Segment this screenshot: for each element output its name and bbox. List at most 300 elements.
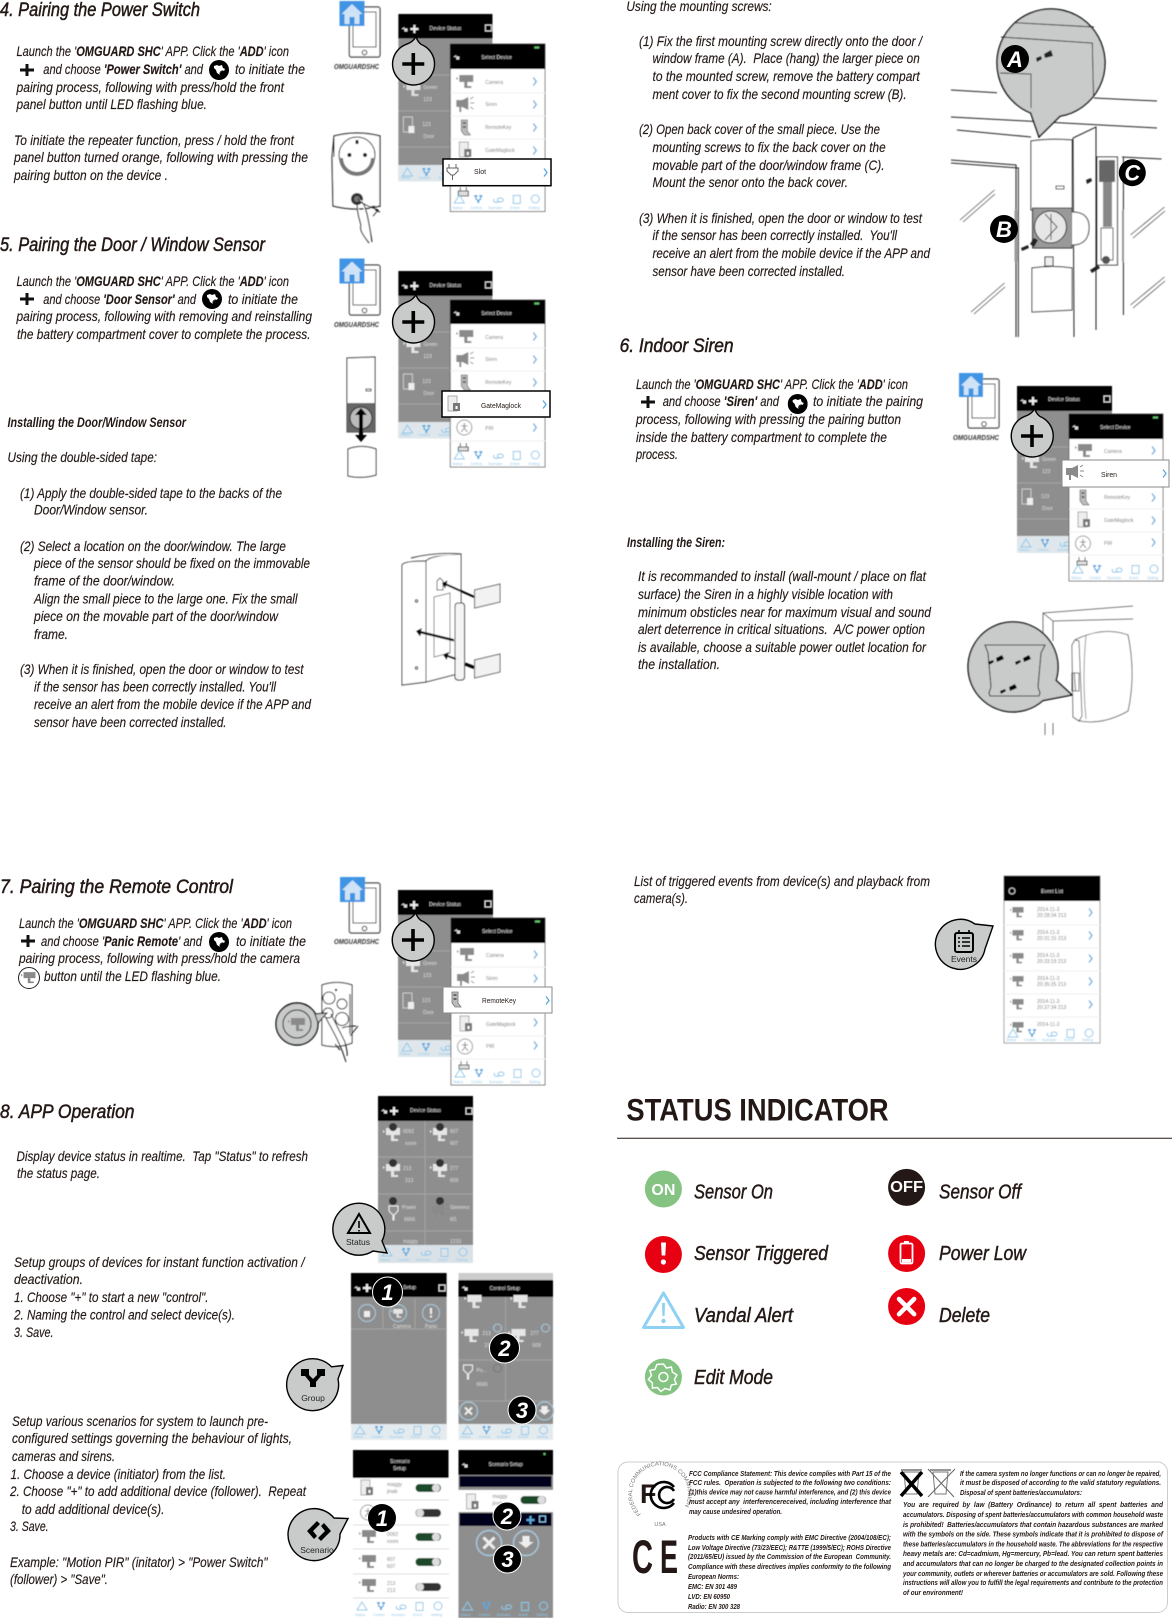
indicator: power low <box>888 1235 1027 1272</box>
phone: section 7 select device screen: Select Device <box>482 929 513 935</box>
phone: section 7 device status screen: 123 <box>422 998 431 1004</box>
phone: section 5 device status screen: Control <box>418 433 430 437</box>
text block: using the mounting screws: movable part of the door/window frame (C). <box>652 157 885 173</box>
badge: control step 1 <box>372 1277 402 1307</box>
phone: control setup steps 2 and 3: Setting <box>536 1435 548 1439</box>
phone: section 5 device status screen: 123 <box>422 379 431 385</box>
phone: scenario setup steps 2 and 3: Scenario Setup <box>488 1462 523 1468</box>
phone: section 4 select device screen: Select Device <box>481 55 512 61</box>
phone: control setup step 1: Event <box>411 1435 420 1439</box>
phone: section 7 select device screen <box>451 918 546 1085</box>
text block: event list description: List of triggered events from device(s) and playback from <box>634 873 930 889</box>
text block: installing the door window sensor: piece of the sensor should be fixed on the immovable <box>33 555 310 571</box>
phone: section 5 select device screen: Control <box>470 462 482 466</box>
badge: scenario step 2: 2 <box>500 1504 514 1529</box>
phone: event list screen: 2014-11-3 <box>1037 953 1060 959</box>
illustration: door sensor battery cover removal <box>347 357 376 477</box>
callout: status <box>333 1203 387 1255</box>
phone: section 4 select device screen: Event <box>510 206 520 210</box>
text block: installing the door window sensor: receive an alert from the mobile device if the APP and <box>34 696 312 712</box>
text block: section 6 instructions: and choose 'Siren' and <box>663 393 780 409</box>
phone: event list screen: Status <box>1006 1038 1016 1042</box>
phone: event list screen: 20:37:34 213 <box>1037 1005 1066 1011</box>
phone: scenario setup list: 607 <box>387 1564 396 1570</box>
indicator: sensor off: Sensor Off <box>939 1181 1023 1203</box>
phone: scenario setup list: 213 <box>387 1588 396 1594</box>
phone: scenario setup steps 2 and 3: Event <box>518 1613 528 1617</box>
phone: control setup steps 2 and 3: Scenario <box>496 1435 511 1439</box>
badge: B: B <box>996 217 1012 242</box>
phone: section 6 select device screen: PIR <box>1104 541 1113 547</box>
text block: installing the siren: surface) the Siren in a highly visible location with <box>638 586 893 602</box>
phone: event list screen: 2014-11-3 <box>1037 976 1060 982</box>
highlighted row: remotekey: RemoteKey <box>482 998 516 1005</box>
text block: event list description: camera(s). <box>634 890 688 906</box>
text block: CE compliance: European Norms: <box>688 1572 739 1581</box>
indicator: edit mode <box>645 1358 773 1396</box>
phone: event list screen: 20:35:25 213 <box>1037 982 1066 988</box>
icon: app home and phone, section 6 <box>953 373 999 442</box>
phone: scenario setup steps 2 and 3: Scenario <box>496 1613 511 1617</box>
phone: scenario setup list <box>353 1450 449 1618</box>
callout: group: Group <box>301 1393 325 1403</box>
text block: section 5 instructions: and choose 'Door Sensor' and <box>43 291 197 307</box>
phone: device status screen: 607 <box>450 1141 459 1147</box>
callout: add plus button <box>393 37 435 85</box>
phone: control setup step 1: Camera <box>393 1324 411 1330</box>
phone: device status screen: 0092 <box>403 1129 414 1135</box>
phone: section 7 select device screen: GateMaglock <box>486 1022 516 1028</box>
text block: scenario description: configured settings governing the behaviour of lights, <box>12 1430 292 1446</box>
phone: scenario setup steps 2 and 3: Status <box>460 1613 471 1617</box>
phone: section 4 select device screen: Setting <box>528 206 540 210</box>
text block: FCC compliance statement: FCC rules. Operation is subjected to the following two conditions: <box>689 1478 891 1487</box>
phone: event list screen: Control <box>1024 1038 1036 1042</box>
text block: using the mounting screws: window frame (A). Place (hang) the larger piece on <box>652 50 920 66</box>
phone: section 7 select device screen: Status <box>453 1080 463 1084</box>
phone: scenario setup steps 2 and 3: Control <box>478 1613 490 1617</box>
text block: section 5 instructions <box>16 273 312 342</box>
heading: status indicator: STATUS INDICATOR <box>626 1092 889 1128</box>
text block: status description <box>16 1148 308 1181</box>
text block: installing the door window sensor: Align the small piece to the large one. Fix the small <box>33 590 298 606</box>
text block: FCC compliance statement: may cause undesired operation. <box>689 1507 782 1516</box>
illustration: remote control with callout <box>276 982 358 1062</box>
text block: installing the siren <box>627 534 932 672</box>
phone: event list screen: 20:33:19 213 <box>1037 959 1066 965</box>
phone: section 4 device status screen <box>398 14 492 182</box>
callout: add plus button <box>392 913 434 961</box>
text block: section 5 instructions: pairing process, following with removing and reinstalling <box>16 308 312 324</box>
panel: section 5 pairing the door window sensor text <box>0 234 312 730</box>
text block: section 6 instructions: process, following with pressing the pairing button <box>635 411 901 427</box>
panel: section 4 pairing the power switch text <box>0 0 308 183</box>
phone: section 6 device status screen: 123 <box>1041 494 1050 500</box>
text block: status description: the status page. <box>17 1165 100 1181</box>
phone: section 4 device status screen: Green <box>423 85 438 91</box>
text block: using the mounting screws <box>626 0 931 279</box>
phone: section 4 device status screen: Scenario <box>438 176 453 180</box>
phone: section 7 select device screen: Control <box>471 1080 483 1084</box>
icon: app home and phone, section 5 <box>334 258 380 329</box>
icon: crossed-out bin, outline <box>928 1469 955 1497</box>
text block: FCC compliance statement: must accept any interferencereceived, including interference that <box>689 1497 891 1506</box>
phone: device status screen: Siemens <box>450 1205 470 1211</box>
phone: section 5 select device screen <box>450 300 545 467</box>
icon: FCC logo: FEDERAL COMMUNICATIONS COMMISSION <box>628 1462 692 1516</box>
phone: event list screen: Scenario <box>1042 1038 1056 1042</box>
text block: section 4 instructions: and choose 'Power Switch' and <box>43 61 204 77</box>
text block: section 4 instructions <box>13 43 308 183</box>
phone: section 4 device status screen: 123 <box>423 97 432 103</box>
phone: control setup steps 2 and 3: Event <box>518 1435 528 1439</box>
phone: section 6 select device screen: GateMaglock <box>1104 518 1134 524</box>
badge: control step 2 <box>490 1333 520 1363</box>
text block: section 7 instructions: button until the LED flashing blue. <box>44 968 221 984</box>
icon: app home and phone, section 4 <box>334 1 380 71</box>
icon: CE mark: C <box>632 1530 653 1583</box>
phone: scenario setup list: Event <box>413 1613 422 1617</box>
phone: device status screen: Device Status <box>410 1108 441 1114</box>
phone: section 5 select device screen: Camera <box>485 335 503 341</box>
phone: section 5 device status screen: Device Status <box>429 283 462 289</box>
phone: event list screen: Event <box>1064 1038 1073 1042</box>
highlighted row: slot <box>443 159 551 186</box>
phone: control setup step 1: Panic <box>425 1324 438 1330</box>
text block: section 7 instructions: Launch the 'OMGUARD SHC' APP. Click the 'ADD' icon <box>19 915 292 931</box>
heading: section 6: 6. Indoor Siren <box>620 335 734 357</box>
phone: section 4 select device screen: GateMaglock <box>485 148 515 154</box>
phone: section 6 select device screen: Event <box>1129 576 1138 580</box>
phone: event list screen: 2014-11-3 <box>1037 907 1060 913</box>
phone: event list screen: 2014-11-3 <box>1037 930 1060 936</box>
phone: section 4 select device screen: RemoteKey <box>485 125 512 131</box>
panel: compliance box <box>618 1462 1168 1613</box>
callout: group <box>287 1359 343 1411</box>
text block: section 6 instructions: process. <box>635 446 678 462</box>
highlighted row: gatemaglock <box>442 391 550 417</box>
phone: control setup steps 2 and 3: Control <box>478 1435 490 1439</box>
phone: scenario setup list: 607 <box>387 1557 396 1563</box>
text block: section 4 instructions: pairing button on the device . <box>13 167 168 183</box>
indicator: sensor on: Sensor On <box>694 1181 773 1203</box>
phone: section 7 device status screen: Status <box>400 1052 410 1056</box>
phone: section 5 device status screen: Scenario <box>438 433 453 437</box>
phone: section 6 device status screen <box>1017 386 1112 553</box>
phone: scenario setup list: room <box>387 1539 398 1545</box>
text block: section 6 instructions: Launch the 'OMGUARD SHC' APP. Click the 'ADD' icon <box>636 376 908 392</box>
phone: control setup steps 2 and 3: 6666 <box>476 1382 488 1388</box>
phone: scenario setup list: Setup <box>393 1466 406 1472</box>
highlighted row: gatemaglock: GateMaglock <box>481 403 521 410</box>
icon: app home and phone, section 5: OMGUARDSHC <box>334 320 379 329</box>
heading: section 8: 8. APP Operation <box>0 1101 134 1123</box>
indicator: edit mode: Edit Mode <box>694 1367 773 1389</box>
phone: section 7 select device screen: Camera <box>486 953 504 959</box>
phone: section 5 select device screen: Event <box>510 462 520 466</box>
phone: section 7 select device screen: Event <box>511 1080 520 1084</box>
phone: section 5 select device screen: RemoteKey <box>485 380 512 386</box>
text block: CE compliance <box>688 1533 892 1611</box>
text block: CE compliance: Radio: EN 300 328 <box>688 1602 741 1611</box>
phone: scenario setup list: Status <box>355 1613 365 1617</box>
phone: control setup steps 2 and 3: 277 <box>530 1331 539 1337</box>
text block: scenario description: Setup various scenarios for system to launch pre- <box>12 1413 268 1429</box>
phone: device status screen: 609 <box>450 1178 459 1184</box>
illustration: siren wall mount <box>968 606 1133 735</box>
phone: scenario setup list: 0092 <box>387 1532 398 1538</box>
badge: control step 3: 3 <box>516 1398 528 1423</box>
indicator: delete <box>888 1288 990 1327</box>
text block: section 7 instructions <box>18 915 306 988</box>
text block: section 6 instructions: to initiate the pairing <box>813 393 923 409</box>
indicator: vandal alert <box>644 1293 794 1328</box>
phone: section 5 device status screen: Green <box>423 342 438 348</box>
phone: section 5 select device screen: Select Device <box>481 311 512 317</box>
text block: installing the siren: Installing the Siren: <box>627 534 725 550</box>
phone: section 6 device status screen: Status <box>1019 548 1029 552</box>
phone: section 4 select device screen <box>450 44 545 212</box>
phone: section 4 select device screen: Scenario <box>488 206 502 210</box>
phone: control setup step 1: Setting <box>429 1435 440 1439</box>
text block: section 7 instructions: and choose 'Panic Remote' and <box>41 933 203 949</box>
text block: section 4 instructions: panel button turned orange, following with pressing the <box>13 149 308 165</box>
phone: section 6 select device screen: Select Device <box>1100 425 1131 431</box>
phone: scenario setup list: Scenario <box>390 1459 410 1465</box>
indicator: sensor on <box>645 1170 773 1208</box>
text block: FCC compliance statement: (1)this device may not cause harmful interference, and (2) this device <box>689 1488 892 1496</box>
text block: section 4 instructions: Launch the 'OMGUARD SHC' APP. Click the 'ADD' icon <box>16 43 289 59</box>
phone: section 5 select device screen: PIR <box>485 426 494 432</box>
phone: section 6 select device screen <box>1069 414 1164 581</box>
illustration: screw mounting of door window sensor <box>951 9 1165 337</box>
callout: events: Events <box>951 954 977 964</box>
phone: section 6 select device screen: Control <box>1089 576 1101 580</box>
callout: add plus button <box>1011 409 1053 457</box>
text block: disposal statement: of our environment! <box>903 1588 963 1597</box>
phone: control setup step 1 <box>351 1273 447 1440</box>
badge: scenario step 1: 1 <box>376 1506 388 1531</box>
phone: section 7 device status screen: Control <box>418 1052 430 1056</box>
panel: section 8 app operation text <box>0 1101 308 1587</box>
phone: section 5 select device screen: Status <box>452 462 463 466</box>
phone: scenario setup list: Scenario <box>391 1613 405 1617</box>
text block: scenario description: to add additional device(s). <box>22 1501 164 1517</box>
text block: disposal statement: Disposal of spent batteries/accumulators: <box>960 1488 1082 1497</box>
text block: section 4 instructions: To initiate the repeater function, press / hold the front <box>14 132 295 148</box>
phone: device status screen: maggy <box>403 1239 419 1245</box>
text block: installing the door window sensor: Using the double-sided tape: <box>8 449 157 465</box>
text block: installing the door window sensor: frame of the door/window. <box>34 572 175 588</box>
phone: section 7 select device screen: Setting <box>529 1080 540 1084</box>
icon: app home and phone, section 7 <box>334 877 380 946</box>
phone: device status screen: Event <box>438 1258 447 1262</box>
callout: scenario <box>288 1509 348 1561</box>
phone: scenario setup list: maggy <box>387 1482 403 1488</box>
text block: section 6 instructions: inside the battery compartment to complete the <box>636 429 887 445</box>
text block: group description: 1. Choose "+" to start a new "control". <box>14 1289 208 1305</box>
phone: event list screen: 2014-11-3 <box>1037 1022 1060 1028</box>
text block: using the mounting screws: ment cover to fix the second mounting screw (B). <box>652 86 907 102</box>
text block: using the mounting screws: (3) When it is finished, open the door or window to test <box>639 210 923 226</box>
phone: device status screen: 6666 <box>404 1217 415 1223</box>
phone: section 7 select device screen: PIR <box>486 1044 495 1050</box>
text block: using the mounting screws: mounting screws to fix the back cover on the <box>652 139 886 155</box>
phone: section 6 select device screen: Setting <box>1147 576 1158 580</box>
text block: CE compliance: (2011/65/EU) issued by the Commission of the European Community. <box>688 1552 891 1561</box>
text block: using the mounting screws: (1) Fix the first mounting screw directly onto the door / <box>639 33 924 49</box>
heading: section 5: 5. Pairing the Door / Window Sensor <box>0 234 266 256</box>
text block: installing the door window sensor <box>8 414 312 730</box>
icon: app home and phone, section 6: OMGUARDSHC <box>953 433 999 442</box>
phone: section 6 device status screen: Green <box>1042 457 1056 463</box>
phone: section 5 select device screen: Siren <box>485 357 497 363</box>
phone: scenario setup list: Setting <box>431 1613 442 1617</box>
illustration: double-sided tape mounting <box>402 554 500 685</box>
phone: scenario setup list: jinab <box>386 1489 398 1495</box>
phone: device status screen: Control <box>398 1258 410 1262</box>
highlighted row: siren: Siren <box>1101 472 1117 479</box>
text block: section 7 instructions: pairing process, following with press/hold the camera <box>18 950 300 966</box>
text block: installing the door window sensor: Door/Window sensor. <box>34 502 148 518</box>
phone: section 6 device status screen: Scenario <box>1057 548 1071 552</box>
phone: control setup steps 2 and 3: 213 <box>482 1331 491 1337</box>
phone: control setup step 1: Control <box>371 1435 383 1439</box>
text block: scenario description: 1. Choose a device (initiator) from the list. <box>10 1466 226 1482</box>
icon: FCC logo: F <box>640 1479 656 1509</box>
text block: using the mounting screws: to the mounted screw, remove the battery compart <box>652 68 921 84</box>
text block: disposal statement <box>902 1469 1164 1597</box>
phone: event list screen: 2014-11-3 <box>1037 999 1060 1005</box>
highlighted row: remotekey <box>443 987 552 1013</box>
phone: section 6 device status screen: Control <box>1037 548 1049 552</box>
badge: control step 2: 2 <box>497 1336 511 1361</box>
text block: CE compliance: LVD: EN 60950 <box>688 1592 731 1601</box>
indicator: vandal alert: Vandal Alert <box>694 1305 794 1327</box>
text block: scenario description: (follower) > "Save". <box>10 1571 108 1587</box>
text block: section 4 instructions: pairing process, following with press/hold the front <box>16 79 285 95</box>
phone: section 6 select device screen: Scenario <box>1107 576 1121 580</box>
text block: group description: 3. Save. <box>14 1324 54 1340</box>
phone: control setup steps 2 and 3: Status <box>460 1435 471 1439</box>
phone: control setup steps 2 and 3: 609 <box>532 1343 541 1349</box>
phone: section 7 device status screen: Scenario <box>438 1052 452 1056</box>
phone: section 7 device status screen: 123 <box>423 973 432 979</box>
text block: group description: Setup groups of devices for instant function activation / <box>14 1254 306 1270</box>
indicator: sensor off: OFF <box>890 1179 923 1196</box>
highlighted row: siren <box>1062 460 1169 487</box>
phone: control setup steps 2 and 3 <box>458 1273 554 1440</box>
text block: scenario description: 3. Save. <box>10 1518 49 1534</box>
phone: event list screen: 20:31:15 213 <box>1037 936 1066 942</box>
phone: scenario setup steps 2 and 3: Setting <box>536 1613 548 1617</box>
phone: section 5 device status screen: Status <box>400 433 411 437</box>
badge: A: A <box>1006 47 1023 72</box>
badge: scenario step 2 <box>493 1502 521 1530</box>
text block: scenario description: Example: "Motion PIR" (initator) > "Power Switch" <box>10 1554 268 1570</box>
illustration: power switch socket <box>332 133 380 243</box>
phone: event list screen: Setting <box>1082 1038 1093 1042</box>
phone: event list screen: Event List <box>1041 889 1064 895</box>
phone: device status screen: 213 <box>403 1166 412 1172</box>
panel: status indicator <box>617 1092 1172 1396</box>
text block: installing the door window sensor: sensor have been corrected installed. <box>34 714 226 730</box>
text block: installing the siren: minimum obsticles near for maximum visual and sound <box>638 604 932 620</box>
phone: device status screen: room <box>405 1141 416 1147</box>
phone: scenario setup list: 213 <box>387 1581 396 1587</box>
phone: scenario setup list: Control <box>373 1613 385 1617</box>
phone: control setup steps 2 and 3: Control Setup <box>490 1286 520 1292</box>
text block: using the mounting screws: sensor have been corrected installed. <box>652 263 845 279</box>
phone: scenario setup steps 2 and 3: jinab <box>492 1501 503 1507</box>
text block: installing the door window sensor: Installing the Door/Window Sensor <box>8 414 187 430</box>
icon: crossed-out bin, black <box>901 1470 922 1496</box>
phone: scenario setup steps 2 and 3 <box>458 1450 553 1618</box>
text block: section 4 instructions: to initiate the <box>235 61 305 77</box>
text block: section 6 instructions <box>635 376 923 462</box>
phone: section 7 device status screen: Door <box>423 1010 434 1016</box>
phone: event list screen: 20:28:34 213 <box>1037 913 1066 919</box>
phone: section 4 device status screen: 123 <box>422 122 431 128</box>
phone: control setup steps 2 and 3: Po... <box>476 1368 487 1374</box>
phone: control setup steps 2 and 3: 213 <box>484 1343 493 1349</box>
phone: section 4 select device screen: Siren <box>485 102 497 108</box>
text block: section 5 instructions: Launch the 'OMGUARD SHC' APP. Click the 'ADD' icon <box>16 273 289 289</box>
phone: control setup step 1: Scenario <box>389 1435 403 1439</box>
phone: device status screen: Setting <box>456 1258 467 1262</box>
phone: device status screen: 607 <box>450 1129 459 1135</box>
text block: group description <box>13 1254 306 1340</box>
text block: event list description <box>634 873 930 906</box>
phone: device status screen: Scenario <box>416 1258 430 1262</box>
text block: CE compliance: Compliance with these directives implies conformity to the following <box>688 1562 891 1571</box>
phone: device status screen: 6f1 <box>450 1217 457 1223</box>
phone: section 7 select device screen: Scenario <box>489 1080 503 1084</box>
phone: section 6 device status screen: Device Status <box>1048 397 1081 403</box>
indicator: sensor triggered <box>645 1236 829 1273</box>
text block: scenario description: 2. Choose "+" to add additional device (follower). Repeat <box>9 1483 307 1499</box>
text block: installing the door window sensor: if the sensor has been correctly installed. You'll <box>34 678 277 694</box>
text block: using the mounting screws: Mount the senor onto the back cover. <box>652 174 848 190</box>
text block: installing the siren: the installation. <box>638 656 720 672</box>
text block: installing the door window sensor: (2) Select a location on the door/window. The large <box>20 538 286 554</box>
callout: events <box>935 919 993 969</box>
phone: device status screen: 277 <box>450 1166 459 1172</box>
phone: section 5 device status screen: 123 <box>423 354 432 360</box>
indicator: sensor triggered: Sensor Triggered <box>694 1243 829 1265</box>
text block: FCC compliance statement <box>689 1469 892 1516</box>
phone: section 4 device status screen: Door <box>423 134 435 140</box>
callout: add plus button <box>393 295 435 343</box>
text block: CE compliance: Low Voltage Directive (73/23/EEC); R&TTE (1999/5/EC); ROHS Directive <box>688 1543 892 1552</box>
callout: status: Status <box>346 1237 370 1247</box>
indicator: delete: Delete <box>939 1305 990 1327</box>
badge: scenario step 3: 3 <box>501 1547 514 1572</box>
callout: scenario: Scenario <box>300 1545 334 1555</box>
text block: status description: Display device status in realtime. Tap "Status" to refresh <box>16 1148 308 1164</box>
text block: installing the door window sensor: (1) Apply the double-sided tape to the backs of the <box>20 485 282 501</box>
text block: scenario description <box>9 1413 307 1587</box>
text block: using the mounting screws: receive an alert from the mobile device if the APP and <box>652 245 931 261</box>
phone: section 5 device status screen <box>398 271 492 438</box>
indicator: sensor on: ON <box>651 1182 675 1199</box>
text block: installing the siren: It is recommanded to install (wall-mount / place on flat <box>638 568 927 584</box>
phone: section 7 device status screen <box>398 890 493 1057</box>
phone: section 5 device status screen: Door <box>423 391 435 397</box>
heading: section 7: 7. Pairing the Remote Control <box>0 876 234 898</box>
text block: installing the door window sensor: (3) When it is finished, open the door or window to test <box>20 661 304 677</box>
icon: app home and phone, section 4: OMGUARDSHC <box>334 62 379 71</box>
